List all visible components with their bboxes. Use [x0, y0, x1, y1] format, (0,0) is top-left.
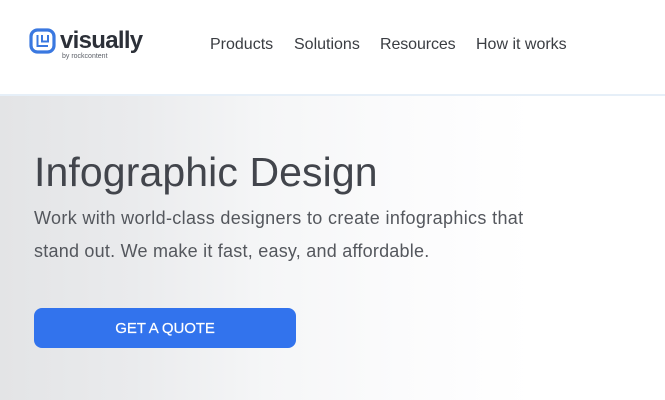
description text: Work with world-class designers to create infographics that — [34, 208, 524, 228]
nav item: how it works: How it works — [476, 36, 567, 53]
description text — [34, 208, 524, 261]
heading: Infographic Design — [34, 149, 378, 195]
icon: visually logo mark — [29, 28, 56, 54]
button: get a quote: GET A QUOTE — [115, 320, 215, 337]
navigation — [210, 36, 567, 53]
nav item: products: Products — [210, 36, 273, 53]
nav item: resources: Resources — [380, 36, 456, 53]
header bar — [0, 0, 665, 94]
nav item: solutions: Solutions — [294, 36, 360, 53]
button: get a quote — [34, 308, 296, 348]
logo tagline: by rockcontent — [62, 53, 108, 60]
logo wordmark: visually — [60, 27, 142, 54]
hero panel — [0, 94, 665, 400]
logo — [29, 27, 143, 60]
description text: stand out. We make it fast, easy, and affordable. — [34, 241, 430, 261]
